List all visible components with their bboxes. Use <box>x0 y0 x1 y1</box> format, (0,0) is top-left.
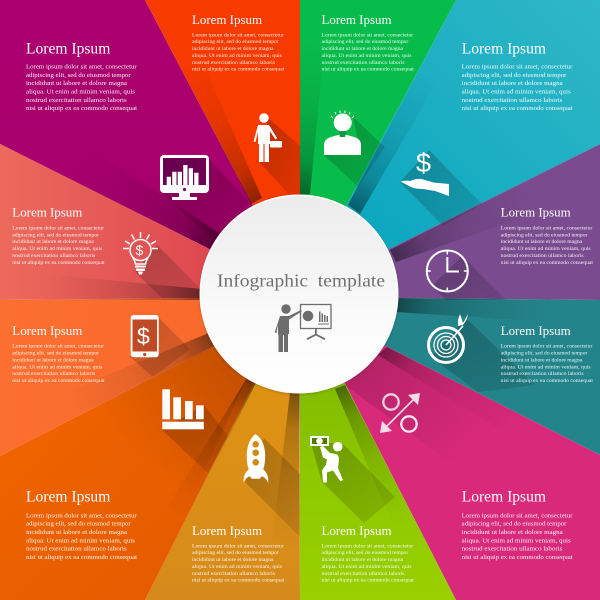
icon: hand holding dollar: $ <box>416 148 431 178</box>
text block: coral <box>12 206 105 266</box>
text block: light orange: Lorem ipsum dolor sit amet, consectetur <box>12 344 104 350</box>
text block: pink: incididunt ut labore et dolore magna <box>462 529 563 536</box>
center disc <box>199 194 399 395</box>
text block: light orange: aliqua. Ut enim ad minim veniam, quis <box>12 364 102 370</box>
text block: lime: adipiscing elit, sed do eiusmod tempor <box>322 550 408 556</box>
icon: clock <box>427 250 468 292</box>
text block: orange: Lorem Ipsum <box>26 489 110 506</box>
text block: lime: incididunt ut labore et dolore magna <box>322 557 404 563</box>
text block: dark teal: nisi ut aliquip ex ea commodo consequat <box>501 378 593 384</box>
icon: percent arrows <box>380 393 420 433</box>
text block: purple: nisi ut aliquip ex ea commodo consequat <box>501 260 593 266</box>
text block: green: incididunt ut labore et dolore magna <box>322 46 404 52</box>
icon: monitor <box>160 155 209 200</box>
icon: bar chart <box>162 389 204 429</box>
text block: magenta: nostrud exercitation ullamco laboris <box>26 97 127 104</box>
text block: pink: adipiscing elit, sed do eiusmod tempor <box>462 521 567 528</box>
text block: purple: adipiscing elit, sed do eiusmod tempor <box>501 232 588 238</box>
text block: red: adipiscing elit, sed do eiusmod tempor <box>192 39 279 45</box>
text block: pink: nostrud exercitation ullamco laboris <box>462 546 563 553</box>
text block: red: incididunt ut labore et dolore magna <box>192 46 274 52</box>
text block: green: Lorem ipsum dolor sit amet, consectetur <box>322 32 413 38</box>
text block: lime: nostrud exercitation ullamco laboris <box>322 571 404 577</box>
text block: teal: nostrud exercitation ullamco laboris <box>462 97 563 104</box>
text block: lime: Lorem Ipsum <box>322 524 392 538</box>
panel: purple sector <box>299 144 600 300</box>
text block: purple: Lorem Ipsum <box>501 206 571 220</box>
text block: pink: Lorem ipsum dolor sit amet, consectetur <box>462 512 573 519</box>
icon: hand holding dollar <box>400 148 449 196</box>
text block: amber <box>192 524 285 584</box>
text block: pink: nisi ut aliquip ex ea commodo consequat <box>462 554 573 561</box>
text block: purple: aliqua. Ut enim ad minim veniam, quis <box>501 246 591 252</box>
text block: magenta: adipiscing elit, sed do eiusmod tempor <box>26 72 132 79</box>
title: Infographic template <box>217 271 385 291</box>
text block: dark teal: Lorem Ipsum <box>501 324 571 338</box>
text block: lime: Lorem ipsum dolor sit amet, consectetur <box>322 543 413 549</box>
text block: red: Lorem ipsum dolor sit amet, consectetur <box>192 32 284 38</box>
text block: purple: incididunt ut labore et dolore magna <box>501 239 583 245</box>
panel: coral sector <box>0 144 299 300</box>
text block: teal: Lorem Ipsum <box>462 40 546 57</box>
text block: amber: adipiscing elit, sed do eiusmod tempor <box>192 550 279 556</box>
icon: target with arrow <box>428 314 468 362</box>
text block: teal: nisi ut aliquip ex ea commodo consequat <box>462 105 573 112</box>
text block: orange: nostrud exercitation ullamco laboris <box>26 546 127 553</box>
text block: light orange: Lorem Ipsum <box>12 324 82 338</box>
panel: amber sector <box>145 294 300 600</box>
text block: dark teal: incididunt ut labore et dolore magna <box>501 357 583 363</box>
icon: idea person <box>324 110 361 155</box>
text block: purple <box>501 206 593 266</box>
text block: green: adipiscing elit, sed do eiusmod tempor <box>322 39 408 45</box>
text block: teal: aliqua. Ut enim ad minim veniam, quis <box>462 88 571 96</box>
text block: light orange: adipiscing elit, sed do eiusmod tempor <box>12 351 99 357</box>
text block: teal: incididunt ut labore et dolore magna <box>462 80 563 87</box>
text block: lime: aliqua. Ut enim ad minim veniam, quis <box>322 564 412 570</box>
panel: magenta sector <box>0 0 299 294</box>
text block: amber: Lorem Ipsum <box>192 524 262 538</box>
text block: green: nisi ut aliquip ex ea commodo consequat <box>322 67 414 73</box>
text block: amber: incididunt ut labore et dolore magna <box>192 557 274 563</box>
panel: red sector <box>145 0 300 294</box>
icon: light bulb with dollar <box>123 232 158 274</box>
text block: orange: aliqua. Ut enim ad minim veniam, quis <box>26 537 135 544</box>
text block: green: Lorem Ipsum <box>322 13 392 27</box>
icon long shadows <box>130 117 535 537</box>
panel: teal sector <box>299 0 600 294</box>
text block: amber: Lorem ipsum dolor sit amet, consectetur <box>192 543 284 549</box>
text block: green: nostrud exercitation ullamco laboris <box>322 60 404 66</box>
text block: coral: Lorem ipsum dolor sit amet, consectetur <box>12 226 104 232</box>
icon: rocket <box>244 434 268 483</box>
icon: smartphone with dollar: $ <box>137 323 150 349</box>
panel: green sector <box>299 0 456 294</box>
panel: lime sector <box>299 294 456 600</box>
text block: green: aliqua. Ut enim ad minim veniam, quis <box>322 53 412 59</box>
text block: magenta: Lorem ipsum dolor sit amet, consectetur <box>26 64 138 70</box>
text block: magenta: nisi ut aliquip ex ea commodo consequat <box>26 105 137 112</box>
text block: red: nisi ut aliquip ex ea commodo consequat <box>192 67 285 73</box>
text block: coral: nostrud exercitation ullamco laboris <box>12 253 95 259</box>
text block: dark teal: nostrud exercitation ullamco laboris <box>501 371 584 377</box>
text block: orange: nisi ut aliquip ex ea commodo consequat <box>26 554 137 561</box>
icon: smartphone with dollar <box>131 315 159 357</box>
text block: lime: nisi ut aliquip ex ea commodo consequat <box>322 578 414 584</box>
text block: red: Lorem Ipsum <box>192 13 262 27</box>
text block: amber: aliqua. Ut enim ad minim veniam, quis <box>192 564 282 570</box>
panel: dark teal sector <box>299 297 600 455</box>
icon: man lifting money <box>310 436 343 482</box>
text block: pink: aliqua. Ut enim ad minim veniam, quis <box>462 537 571 544</box>
panel: light orange sector <box>0 297 299 456</box>
text block: light orange: incididunt ut labore et dolore magna <box>12 357 94 363</box>
text block: red: nostrud exercitation ullamco laboris <box>192 60 275 66</box>
text block: coral: nisi ut aliquip ex ea commodo consequat <box>12 260 105 266</box>
text block: coral: aliqua. Ut enim ad minim veniam, quis <box>12 246 102 252</box>
text block: magenta <box>26 40 138 112</box>
text block: coral: incididunt ut labore et dolore magna <box>12 239 94 245</box>
text block: red <box>192 13 285 73</box>
icon: businessman with briefcase <box>254 113 282 162</box>
text block: dark teal: Lorem ipsum dolor sit amet, consectetur <box>501 344 593 350</box>
text block: pink: Lorem Ipsum <box>462 489 546 506</box>
text block: light orange: nostrud exercitation ullamco laboris <box>12 371 95 377</box>
text block: coral: Lorem Ipsum <box>12 206 82 220</box>
text block: red: aliqua. Ut enim ad minim veniam, quis <box>192 53 282 59</box>
text block: magenta: Lorem Ipsum <box>26 40 110 57</box>
text block: orange: incididunt ut labore et dolore magna <box>26 529 127 536</box>
text block: pink <box>462 489 573 561</box>
text block: light orange <box>12 324 105 384</box>
text block: magenta: incididunt ut labore et dolore magna <box>26 80 127 87</box>
text block: magenta: aliqua. Ut enim ad minim veniam, quis <box>26 88 135 96</box>
text block: purple: nostrud exercitation ullamco laboris <box>501 253 584 259</box>
text block: dark teal <box>501 324 593 384</box>
panel: pink sector <box>299 294 600 600</box>
text block: amber: nostrud exercitation ullamco laboris <box>192 571 275 577</box>
text block: light orange: nisi ut aliquip ex ea commodo consequat <box>12 378 105 384</box>
text block: dark teal: aliqua. Ut enim ad minim veniam, quis <box>501 364 591 370</box>
text block: teal <box>462 40 573 112</box>
text block: orange <box>26 489 138 561</box>
text block: lime <box>322 524 414 584</box>
text block: orange: adipiscing elit, sed do eiusmod tempor <box>26 521 132 528</box>
text block: purple: Lorem ipsum dolor sit amet, consectetur <box>501 226 593 232</box>
panel: orange sector <box>0 294 299 600</box>
text block: teal: Lorem ipsum dolor sit amet, consectetur <box>462 64 573 70</box>
icon: presenter with board <box>275 304 331 352</box>
text block: green <box>322 13 414 73</box>
text block: coral: adipiscing elit, sed do eiusmod tempor <box>12 232 99 238</box>
text block: amber: nisi ut aliquip ex ea commodo consequat <box>192 578 285 584</box>
text block: orange: Lorem ipsum dolor sit amet, consectetur <box>26 512 138 519</box>
text block: dark teal: adipiscing elit, sed do eiusmod tempor <box>501 351 588 357</box>
text block: teal: adipiscing elit, sed do eiusmod tempor <box>462 72 567 79</box>
icon: light bulb with dollar: $ <box>136 242 144 258</box>
